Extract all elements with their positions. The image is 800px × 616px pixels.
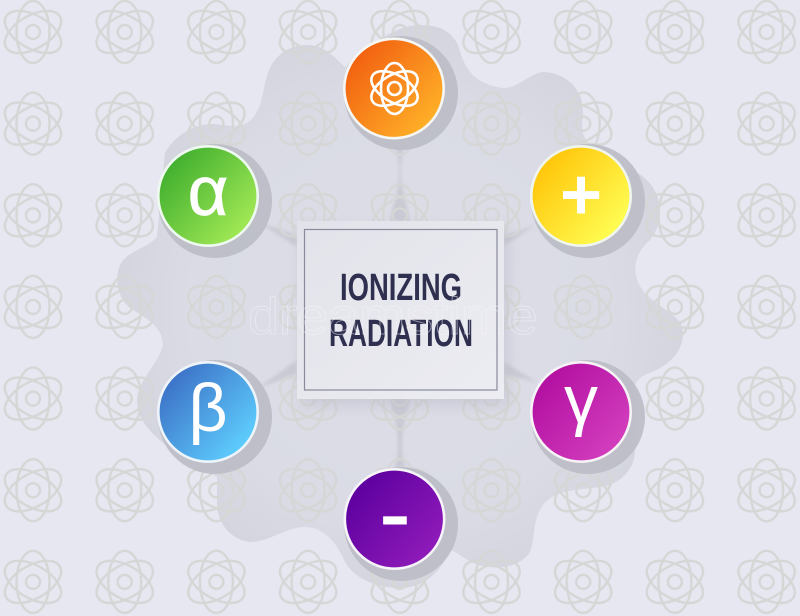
connector: bottom bbox=[390, 398, 410, 468]
circle: plus yellow bbox=[531, 146, 631, 246]
circle: minus purple bbox=[345, 469, 444, 569]
symbol: gamma: γ bbox=[564, 362, 598, 438]
circle shadows bbox=[158, 36, 645, 581]
symbol: minus: - bbox=[380, 477, 410, 553]
connector: gamma bbox=[504, 362, 537, 382]
circle: gamma magenta bbox=[531, 362, 631, 462]
symbol: beta: β bbox=[188, 370, 228, 446]
connector: alpha bbox=[258, 222, 297, 247]
icon: atom bbox=[366, 63, 423, 114]
connector: beta bbox=[258, 360, 297, 388]
central title panel bbox=[297, 221, 504, 399]
circle: alpha green bbox=[158, 146, 258, 246]
title text: IONIZING bbox=[340, 267, 462, 309]
watermark: dreamstime bbox=[248, 288, 538, 346]
connectors bbox=[258, 146, 537, 468]
blob shape behind diagram bbox=[117, 25, 683, 588]
circle: beta blue bbox=[158, 362, 258, 462]
connector: top bbox=[390, 146, 410, 222]
connector: plus bbox=[504, 225, 535, 246]
circle: atom icon orange bbox=[344, 39, 444, 138]
symbol: alpha: α bbox=[188, 152, 228, 230]
central box shadow bbox=[300, 228, 508, 406]
title text bbox=[329, 267, 473, 355]
symbol: plus: + bbox=[560, 155, 602, 235]
title text: RADIATION bbox=[329, 313, 473, 355]
